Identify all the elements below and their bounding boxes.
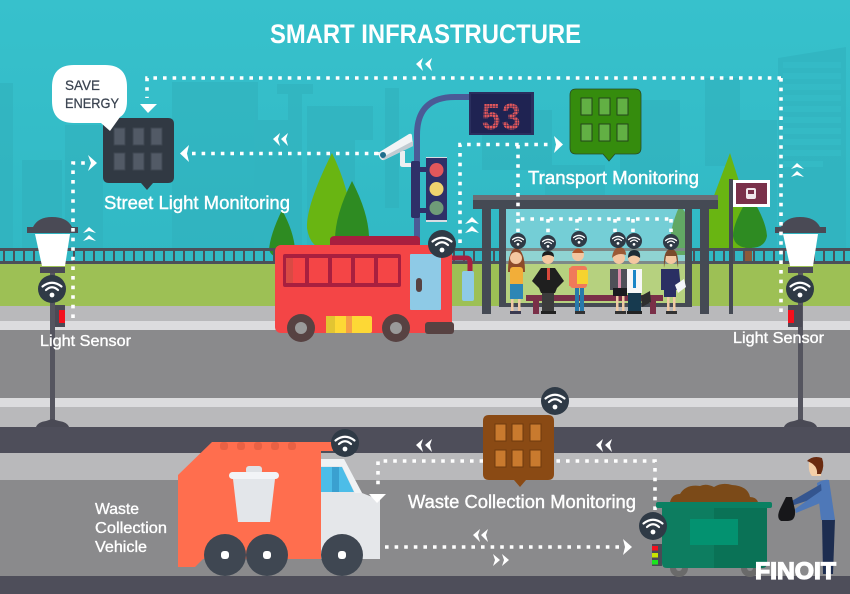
- label: waste collection vehicle: Collection: [95, 520, 167, 537]
- trees behind bus: [269, 153, 369, 258]
- digital countdown display: 53: [481, 98, 521, 141]
- save energy speech bubble: [52, 65, 127, 131]
- label: left light sensor: Light Sensor: [40, 333, 131, 350]
- icon: bus wifi: [428, 230, 456, 258]
- save energy speech bubble: SAVE: [65, 77, 100, 93]
- title: SMART INFRASTRUCTURE: [270, 19, 581, 49]
- person: woman in navy suit with papers: [661, 249, 686, 314]
- background: right tower window bands: [783, 62, 841, 167]
- label: right light sensor: Light Sensor: [733, 330, 824, 347]
- background: city skyline: [0, 47, 846, 248]
- icon: commuter wifi set: [510, 231, 679, 251]
- icon: surveillance camera: [374, 134, 413, 167]
- panel: transport monitoring: [570, 89, 641, 161]
- man with trash bag: [778, 457, 835, 574]
- shelter bench: [526, 295, 663, 314]
- label: street light monitoring: Street Light Monitoring: [104, 193, 290, 213]
- traffic signal pole with arm: [417, 97, 470, 246]
- label: waste collection monitoring: Waste Collection Monitoring: [408, 492, 636, 512]
- save energy speech bubble: ENERGY: [65, 95, 120, 111]
- person: woman with yellow folder: [569, 248, 588, 314]
- red bus: [275, 236, 474, 342]
- label: transport monitoring: Transport Monitoring: [528, 168, 699, 188]
- icon: road wifi: [541, 387, 569, 415]
- fence: [0, 248, 850, 264]
- arrows and chevrons: [83, 58, 804, 566]
- person: woman in orange top: [508, 248, 525, 314]
- label: waste collection vehicle: Waste: [95, 501, 139, 518]
- label: waste collection vehicle: Vehicle: [95, 539, 147, 556]
- panel: street light monitoring: [103, 118, 174, 190]
- right street lamp: [775, 217, 826, 427]
- garbage truck: [178, 442, 380, 576]
- tree behind bus stop sign: [709, 153, 767, 264]
- waste dumpster: [656, 484, 772, 577]
- icon: dumpster wifi: [639, 512, 667, 540]
- person: man with blue tie and briefcase: [627, 250, 651, 314]
- data link lines: [73, 78, 781, 547]
- bus shelter: [473, 195, 718, 314]
- traffic light: [411, 157, 447, 222]
- person: woman in grey jacket: [610, 247, 628, 314]
- person: man in black suit: [532, 251, 564, 314]
- label: waste collection vehicle: [95, 501, 167, 556]
- bus stop sign: [729, 179, 770, 314]
- dumpster fill level sensor: [652, 544, 662, 566]
- left street lamp: [27, 217, 78, 427]
- panel: waste collection monitoring: [483, 415, 554, 487]
- icon: truck wifi: [331, 429, 359, 457]
- digital countdown display: [469, 92, 534, 141]
- finoit logo: FINOIT: [755, 558, 836, 585]
